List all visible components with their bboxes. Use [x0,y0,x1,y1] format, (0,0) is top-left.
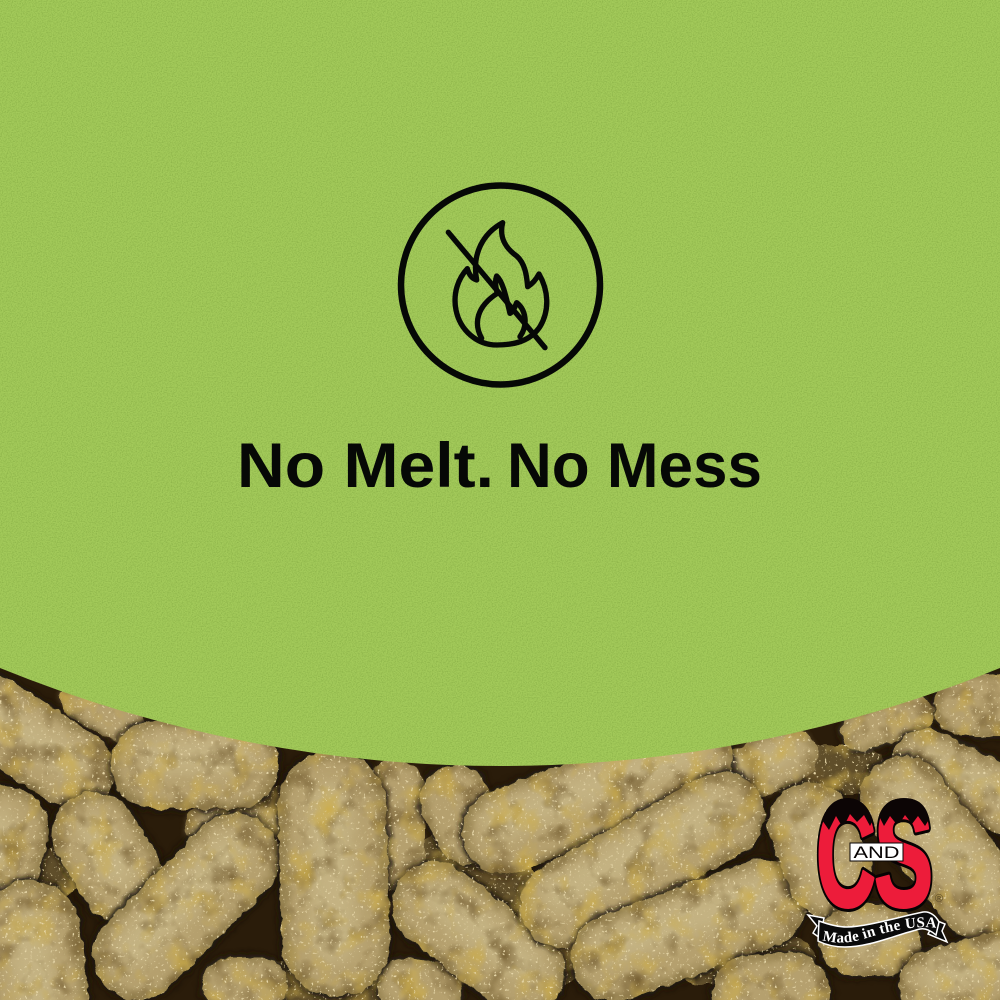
logo AND box [850,843,903,862]
logo letters C and S: C [816,773,876,938]
logo letters C and S: S [874,773,933,938]
logo AND box: AND [854,843,900,862]
icon: no-fire symbol in a circle [401,186,600,384]
heading: No Mess [507,431,762,501]
photo background: feed pellets [0,650,1000,1000]
logo letters C and S: S [874,773,933,938]
logo letters C and S [816,773,933,938]
logo banner: Made in the USA [822,917,936,943]
logo banner [806,911,948,948]
heading: No Melt. [237,431,494,501]
heading [237,431,762,501]
logo registered mark: ® [935,893,943,905]
logo charred top [821,798,930,830]
logo letters C and S: C [816,773,876,938]
logo: C and S, Made in the USA [806,773,948,948]
green curved panel [0,0,1000,766]
